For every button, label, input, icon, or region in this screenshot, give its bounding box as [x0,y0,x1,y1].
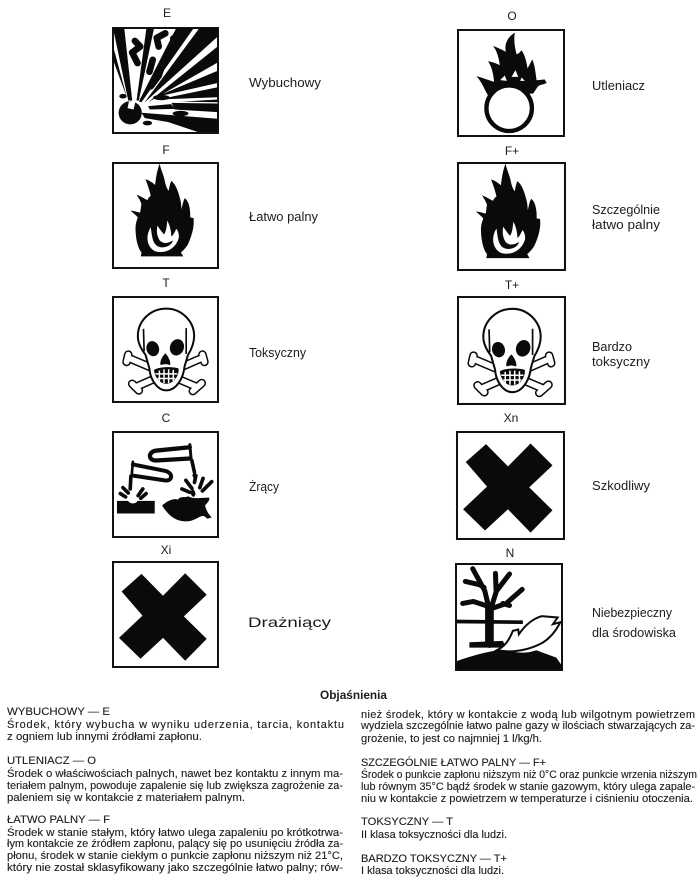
code O: O [507,9,517,23]
entry: highly flammable [361,756,697,805]
label: łatwo palny [592,218,661,232]
entry: flammable continued [360,709,695,745]
icon: skull and crossbones [113,297,218,402]
code T+: T+ [505,278,519,292]
label [592,340,651,369]
entry: explosive: z ogniem lub innymi źródłami zapłonu. [7,731,202,743]
label: toksyczny [592,355,651,369]
entry: explosive: Środek, który wybucha w wyniku uderzenia, tarcia, kontaktu [7,718,344,731]
title: Objaśnienia [320,690,388,702]
sign C: corrosive [113,411,280,537]
sign F: flammable [113,143,319,268]
entry: explosive [7,706,344,743]
code F+: F+ [505,144,519,158]
entry: highly flammable: niu w kontakcie z powietrzem w temperaturze i ciśnieniu otoczenia. [361,793,693,805]
entry: flammable: ŁATWO PALNY — F [7,814,110,826]
icon: flame over circle [458,30,564,136]
icon: X cross [113,562,218,667]
code Xi: Xi [161,543,171,557]
code C: C [162,411,171,425]
left text column [7,706,344,874]
icon: flame [113,163,218,268]
entry: flammable continued: nież środek, który w kontakcie z wodą lub wilgotnym powietrzem [361,709,695,721]
icon: explosion [113,28,218,133]
sign T+: very toxic [458,278,651,404]
entry: flammable: łym kontakcie ze źródłem zapłonu, palący się po usunięciu źródła za- [7,838,343,850]
icon: dead tree and fish [456,564,562,670]
sign F+: highly flammable [458,144,661,270]
entry: very toxic: BARDZO TOKSYCZNY — T+ [361,853,507,865]
entry: oxidizing: paleniem się w kontakcie z materiałem palnym. [7,792,245,804]
sign O: oxidizing [458,9,645,136]
entry: highly flammable: SZCZEGÓLNIE ŁATWO PALNY — F+ [361,756,546,769]
sign N: dangerous for the environment [456,546,676,670]
entry: oxidizing: Środek o właściwościach palnych, nawet bez kontaktu z innym ma- [7,767,343,780]
entry: flammable: Środek w stanie stałym, który łatwo ulega zapaleniu po krótkotrwa- [7,826,343,839]
code E: E [163,6,171,20]
entry: oxidizing: UTLENIACZ — O [7,755,96,767]
sign Xn: harmful [457,411,651,539]
label [592,203,661,232]
right text column [360,709,697,877]
sign E: explosive [113,6,322,133]
label: dla środowiska [592,626,676,640]
entry: flammable: płonu, środek w stanie ciekłym o punkcie zapłonu niższym niż 21°C, [7,850,343,862]
code Xn: Xn [504,411,518,425]
entry: explosive: WYBUCHOWY — E [7,706,110,718]
label: Wybuchowy [249,76,322,90]
label: Szkodliwy [592,479,651,493]
code T: T [162,276,170,290]
icon: skull and crossbones [458,297,565,404]
entry: highly flammable: lub równym 35°C bądź środek w stanie gazowym, który ulega zapale- [361,781,695,793]
entry: toxic: II klasa toksyczności dla ludzi. [361,829,507,841]
label: Toksyczny [249,346,307,360]
label: Utleniacz [592,79,645,93]
label: Niebezpieczny [592,606,673,620]
entry: very toxic [361,853,507,877]
entry: very toxic: I klasa toksyczności dla ludzi. [361,865,504,877]
entry: flammable continued: wydziela szczególnie łatwo palne gazy w ilościach stwarzających za- [360,720,695,732]
entry: flammable [7,814,343,874]
label: Szczególnie [592,203,660,217]
entry: toxic: TOKSYCZNY — T [361,816,453,828]
label [592,606,676,640]
sign Xi: irritant [113,543,331,667]
icon: flame [458,163,565,270]
code N: N [506,546,514,560]
label: Bardzo [592,340,632,354]
icon: corrosive [113,432,218,537]
code F: F [162,143,170,157]
label: Drażniący [248,614,331,630]
entry: oxidizing [7,755,343,804]
entry: flammable: który nie został sklasyfikowany jako szczególnie łatwo palny; rów- [7,862,343,874]
label: Łatwo palny [249,210,319,224]
entry: flammable continued: grożenie, to jest co najmniej 1 l/kg/h. [361,733,542,745]
label: Żrący [249,480,280,494]
sign T: toxic [113,276,307,402]
entry: toxic [361,816,507,841]
entry: oxidizing: teriałem palnym, powoduje zapalenie się lub zwiększa zagrożenie za- [7,780,343,792]
icon: X cross [457,432,564,539]
